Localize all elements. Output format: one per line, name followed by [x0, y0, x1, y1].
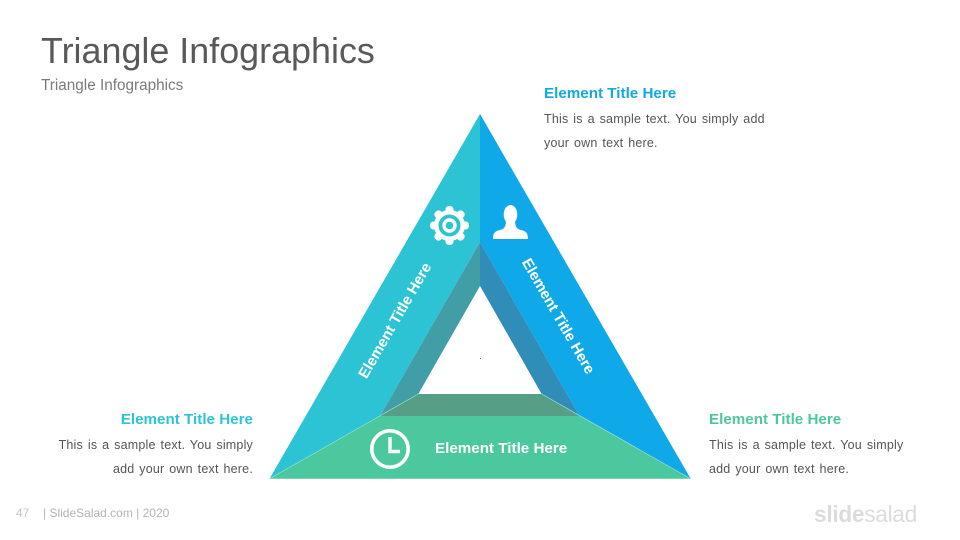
- panel: bottom face: [270, 394, 691, 479]
- icon: gear: [430, 206, 469, 245]
- text block: top right: [544, 85, 765, 150]
- text block: bottom left: [58, 411, 253, 476]
- body: bottom left: [58, 438, 253, 476]
- label: left face: Element Title Here: [355, 260, 435, 382]
- body: bottom left: add your own text here.: [113, 462, 253, 476]
- heading: bottom right: Element Title Here: [709, 411, 841, 428]
- body: bottom left: This is a sample text. You simply: [59, 438, 253, 452]
- icon: clock: [372, 431, 408, 467]
- logo: slidesalad: slidesalad: [814, 501, 917, 527]
- label: right face: Element Title Here: [518, 256, 598, 377]
- body: bottom right: add your own text here.: [709, 462, 849, 476]
- body: top right: This is a sample text. You simply add: [544, 112, 765, 126]
- body: top right: your own text here.: [544, 136, 658, 150]
- body: bottom right: This is a sample text. You simply: [709, 438, 903, 452]
- heading: bottom left: Element Title Here: [121, 411, 253, 428]
- subtitle: Triangle Infographics: [41, 77, 183, 94]
- body: top right: [544, 112, 765, 150]
- panel: right face: [480, 114, 691, 479]
- text block: bottom right: [709, 411, 904, 476]
- page number: 47: [16, 506, 29, 520]
- footer text: | SlideSalad.com | 2020: [43, 506, 169, 520]
- icon: person: [493, 205, 528, 239]
- panel: left face: [270, 114, 480, 479]
- heading: top right: Element Title Here: [544, 85, 676, 102]
- title: Triangle Infographics: [41, 31, 375, 71]
- body: bottom right: [709, 438, 904, 476]
- label: bottom face: Element Title Here: [435, 440, 567, 457]
